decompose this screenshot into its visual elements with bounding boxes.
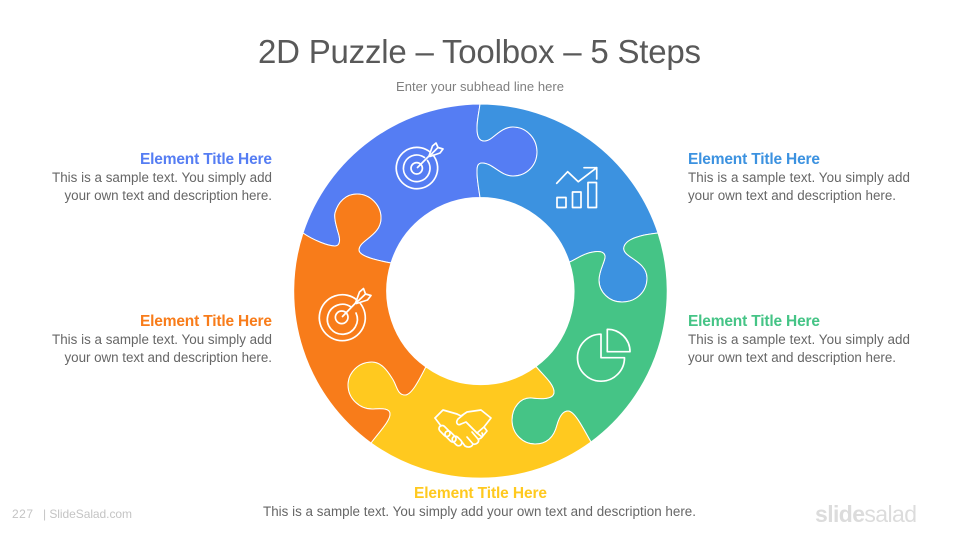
text block: bottom left: This is a sample text. You simply add	[52, 332, 272, 347]
text block: top right: Element Title Here	[688, 151, 820, 168]
footer: page number and site: 227	[12, 507, 33, 521]
icon: target (blue piece)	[396, 143, 443, 189]
text block: bottom center: Element Title Here	[414, 485, 547, 502]
text block: top right: This is a sample text. You simply add	[688, 170, 910, 185]
puzzle piece: yellow	[348, 362, 591, 478]
text block: top left: your own text and description here.	[64, 188, 272, 203]
text block: top left	[52, 151, 272, 203]
text block: bottom left: Element Title Here	[140, 313, 272, 330]
text block: top left: This is a sample text. You simply add	[52, 170, 272, 185]
icon: growth chart	[557, 168, 597, 208]
icon: handshake	[435, 410, 491, 447]
text block: bottom right	[688, 313, 910, 365]
text block: bottom right: Element Title Here	[688, 313, 820, 330]
text block: top right: your own text and description here.	[688, 188, 896, 203]
subhead: Enter your subhead line here	[396, 79, 564, 94]
puzzle piece: green	[512, 233, 667, 444]
puzzle piece: sky blue	[477, 104, 658, 302]
title: 2D Puzzle – Toolbox – 5 Steps	[258, 33, 701, 70]
text block: top right	[688, 151, 910, 203]
text block: bottom right: your own text and description here.	[688, 350, 896, 365]
icon: target (orange piece)	[319, 288, 371, 341]
puzzle piece: blue	[303, 104, 537, 263]
text block: bottom center: This is a sample text. You simply add your own text and description here.	[263, 504, 696, 519]
icon: pie chart	[577, 329, 630, 381]
puzzle piece: orange	[294, 194, 426, 443]
text block: bottom right: This is a sample text. You simply add	[688, 332, 910, 347]
puzzle ring	[294, 104, 667, 478]
text block: top left: Element Title Here	[140, 151, 272, 168]
footer: page number and site: | SlideSalad.com	[43, 507, 132, 521]
logo: slidesalad wordmark: slidesalad	[815, 501, 917, 527]
text block: bottom center	[263, 485, 696, 519]
text block: bottom left: your own text and description here.	[64, 350, 272, 365]
text block: bottom left	[52, 313, 272, 365]
